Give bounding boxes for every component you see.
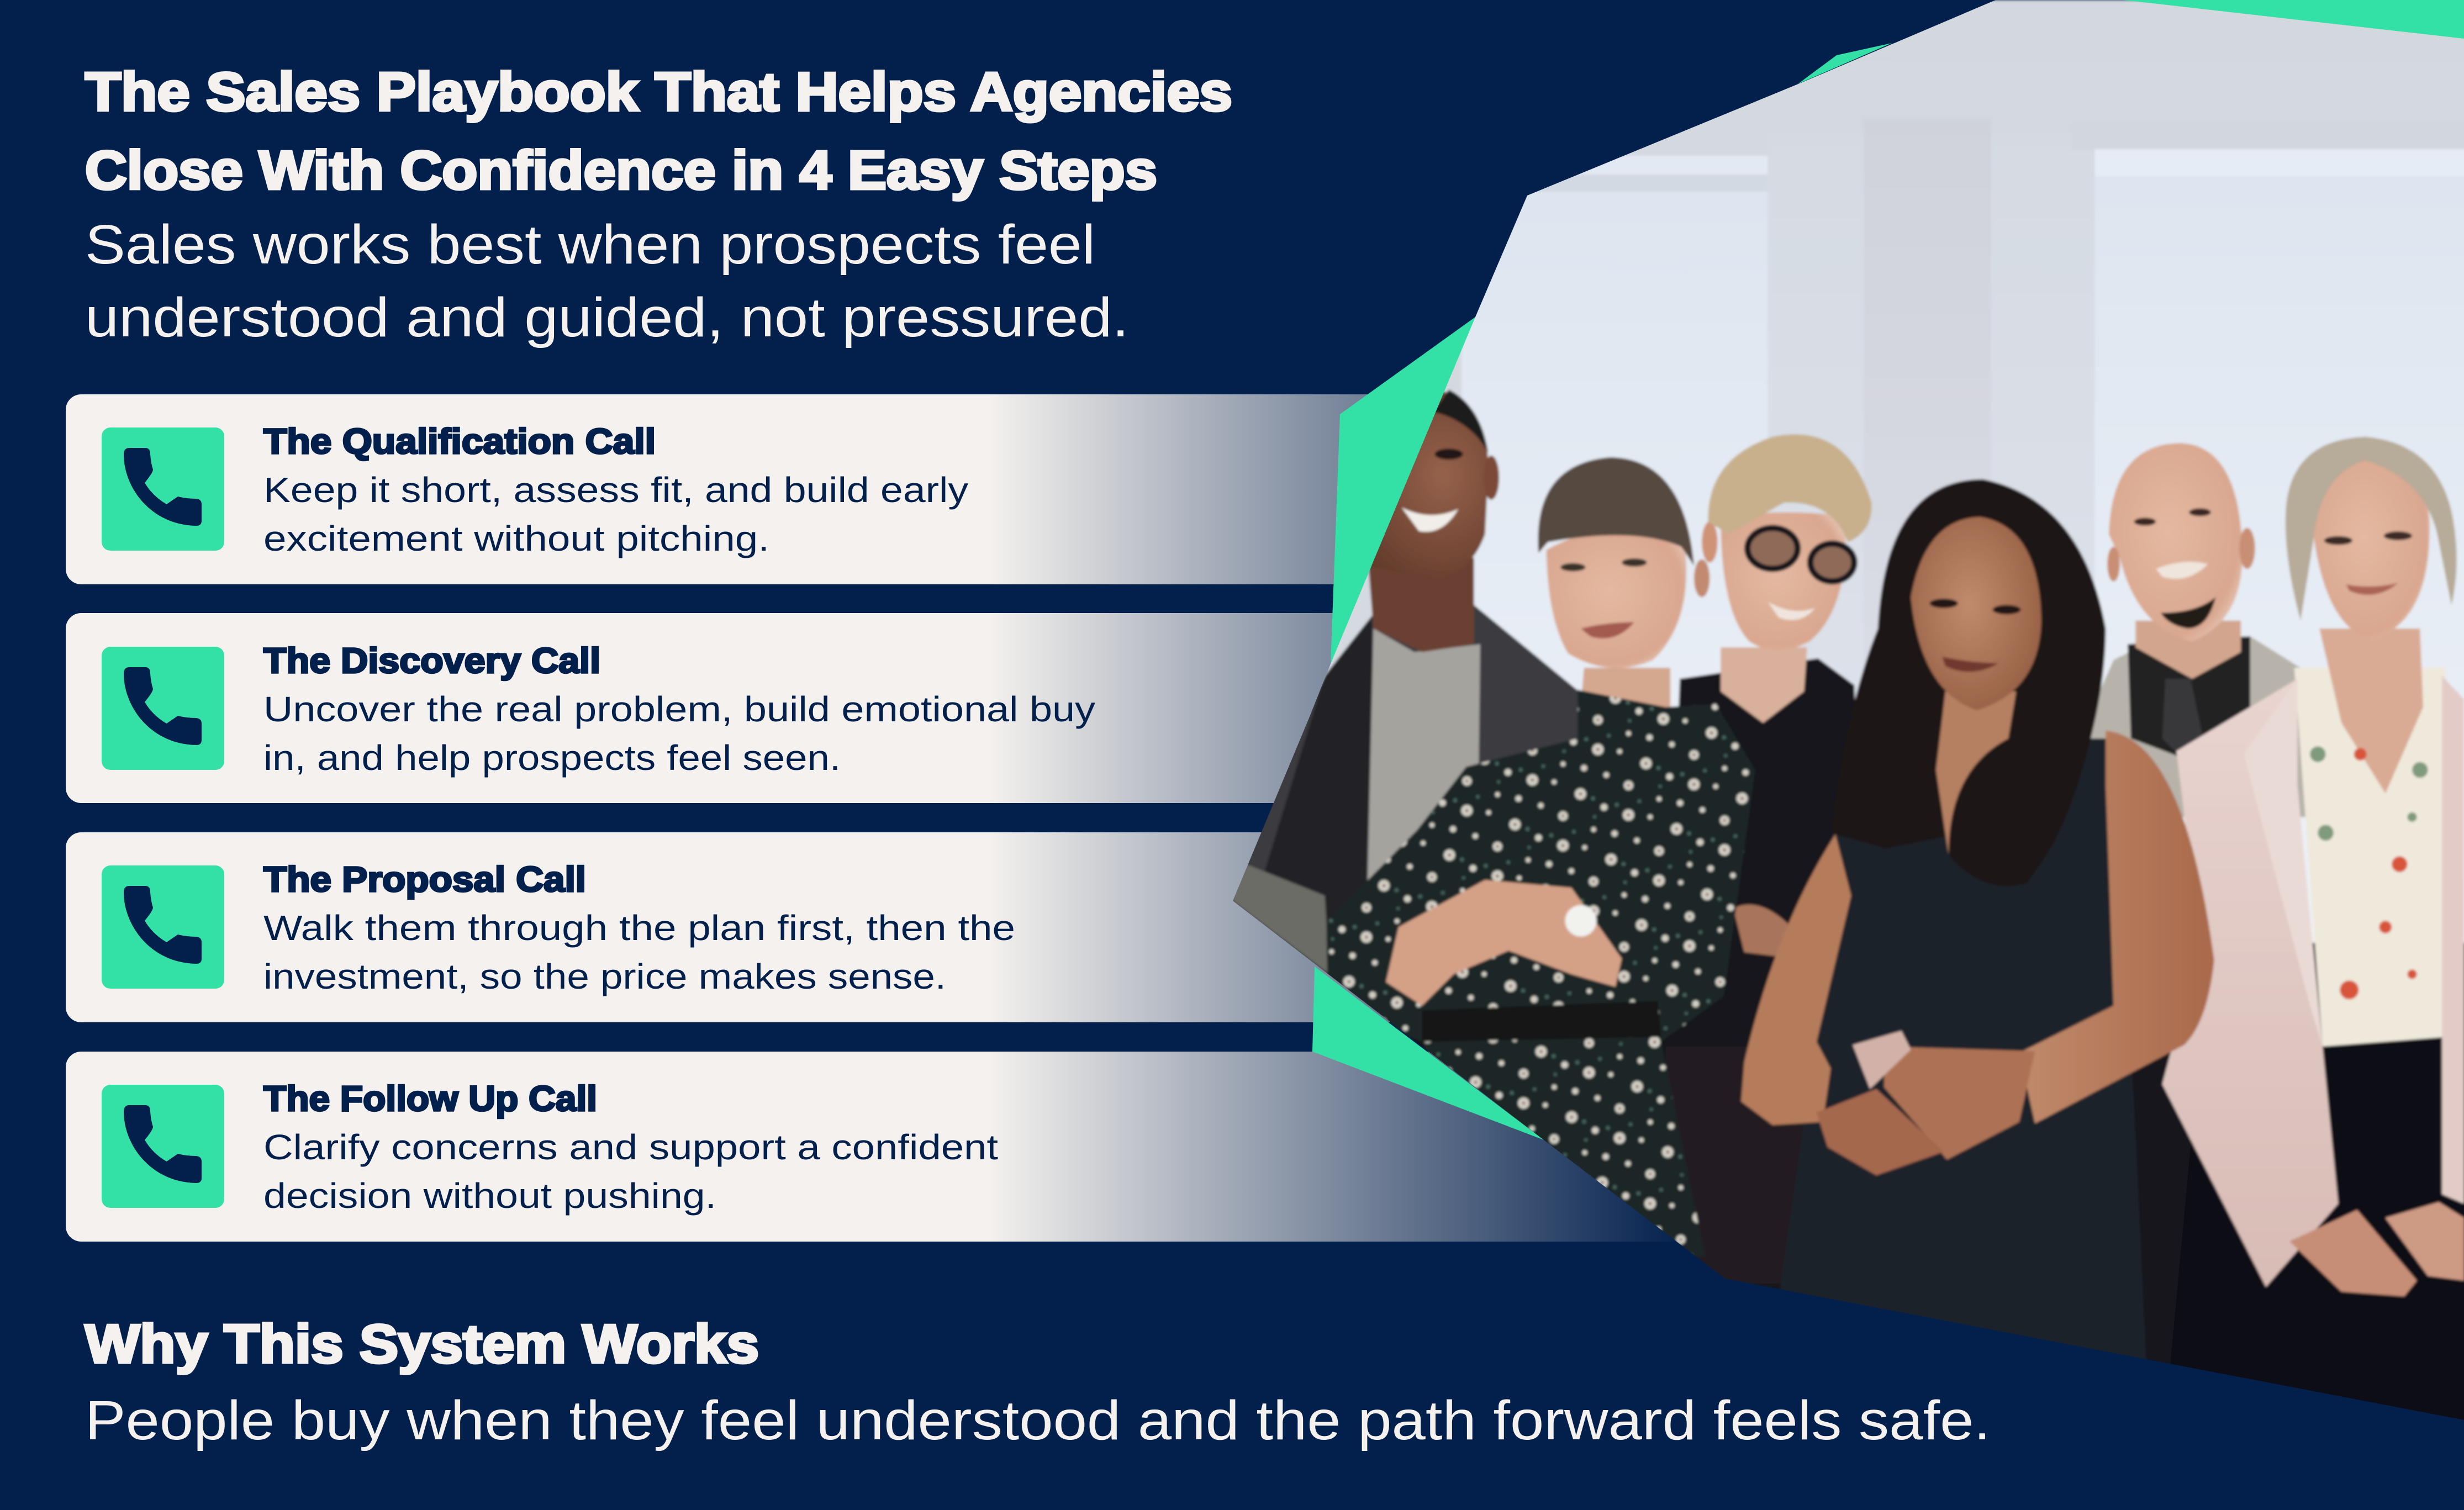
person 3: older woman with glasses xyxy=(1666,434,1872,1289)
step text: The Qualification Call xyxy=(263,421,656,461)
panel: step cards xyxy=(66,394,1778,1242)
green accent: left upper xyxy=(1331,317,1475,664)
title: The Sales Playbook That Helps Agencies xyxy=(85,61,1232,122)
title: Close With Confidence in 4 Easy Steps xyxy=(85,140,1157,200)
icon: phone tile xyxy=(102,865,224,989)
step text: investment, so the price makes sense. xyxy=(263,957,946,996)
subtitle xyxy=(85,214,1129,349)
step text: Walk them through the plan first, then the xyxy=(263,908,1015,948)
step text: excitement without pitching. xyxy=(263,519,769,558)
card background: follow up xyxy=(66,1052,1778,1242)
step text: Clarify concerns and support a confident xyxy=(263,1127,998,1167)
person 2: woman in floral dress xyxy=(1326,457,1755,1257)
title xyxy=(85,61,1232,200)
card background: proposal xyxy=(66,832,1778,1022)
card background: qualification xyxy=(66,394,1778,584)
step 2: discovery call xyxy=(102,641,1095,778)
step 3: proposal call xyxy=(102,859,1015,996)
photo: team of six professionals xyxy=(1210,0,2464,1508)
wall background xyxy=(1320,0,2464,1420)
step text: The Discovery Call xyxy=(263,641,600,680)
icon: phone tile xyxy=(102,427,224,551)
green accent: top right xyxy=(2123,0,2464,39)
person 1: man in grey jacket xyxy=(1233,389,1581,974)
subtitle: Sales works best when prospects feel xyxy=(85,214,1095,276)
step text xyxy=(263,1079,998,1216)
step 1: qualification call xyxy=(102,421,968,558)
step text: The Follow Up Call xyxy=(263,1079,597,1118)
step 4: follow up call xyxy=(102,1079,998,1216)
step text xyxy=(263,641,1095,778)
person 5: bald man with goatee xyxy=(2079,443,2310,817)
card background: discovery xyxy=(66,613,1778,803)
icon: phone tile xyxy=(102,1085,224,1208)
step text: Uncover the real problem, build emotional buy xyxy=(263,689,1095,729)
green accent: left lower xyxy=(1312,967,1544,1140)
step text xyxy=(263,859,1015,996)
heading: why this system works: Why This System Works xyxy=(85,1313,759,1374)
person 6: woman in pink blazer xyxy=(2162,437,2464,1445)
subtitle: understood and guided, not pressured. xyxy=(85,287,1129,349)
green accent: small top sliver xyxy=(1798,43,1892,84)
step text: decision without pushing. xyxy=(263,1176,716,1216)
step text: Keep it short, assess fit, and build early xyxy=(263,470,968,510)
closing statement: People buy when they feel understood and the path forward feels safe. xyxy=(85,1390,1991,1451)
icon: phone tile xyxy=(102,647,224,770)
person 4: woman in dark dress, centre xyxy=(1741,479,2214,1367)
step text: The Proposal Call xyxy=(263,859,586,899)
step text: in, and help prospects feel seen. xyxy=(263,738,841,778)
step text xyxy=(263,421,968,558)
